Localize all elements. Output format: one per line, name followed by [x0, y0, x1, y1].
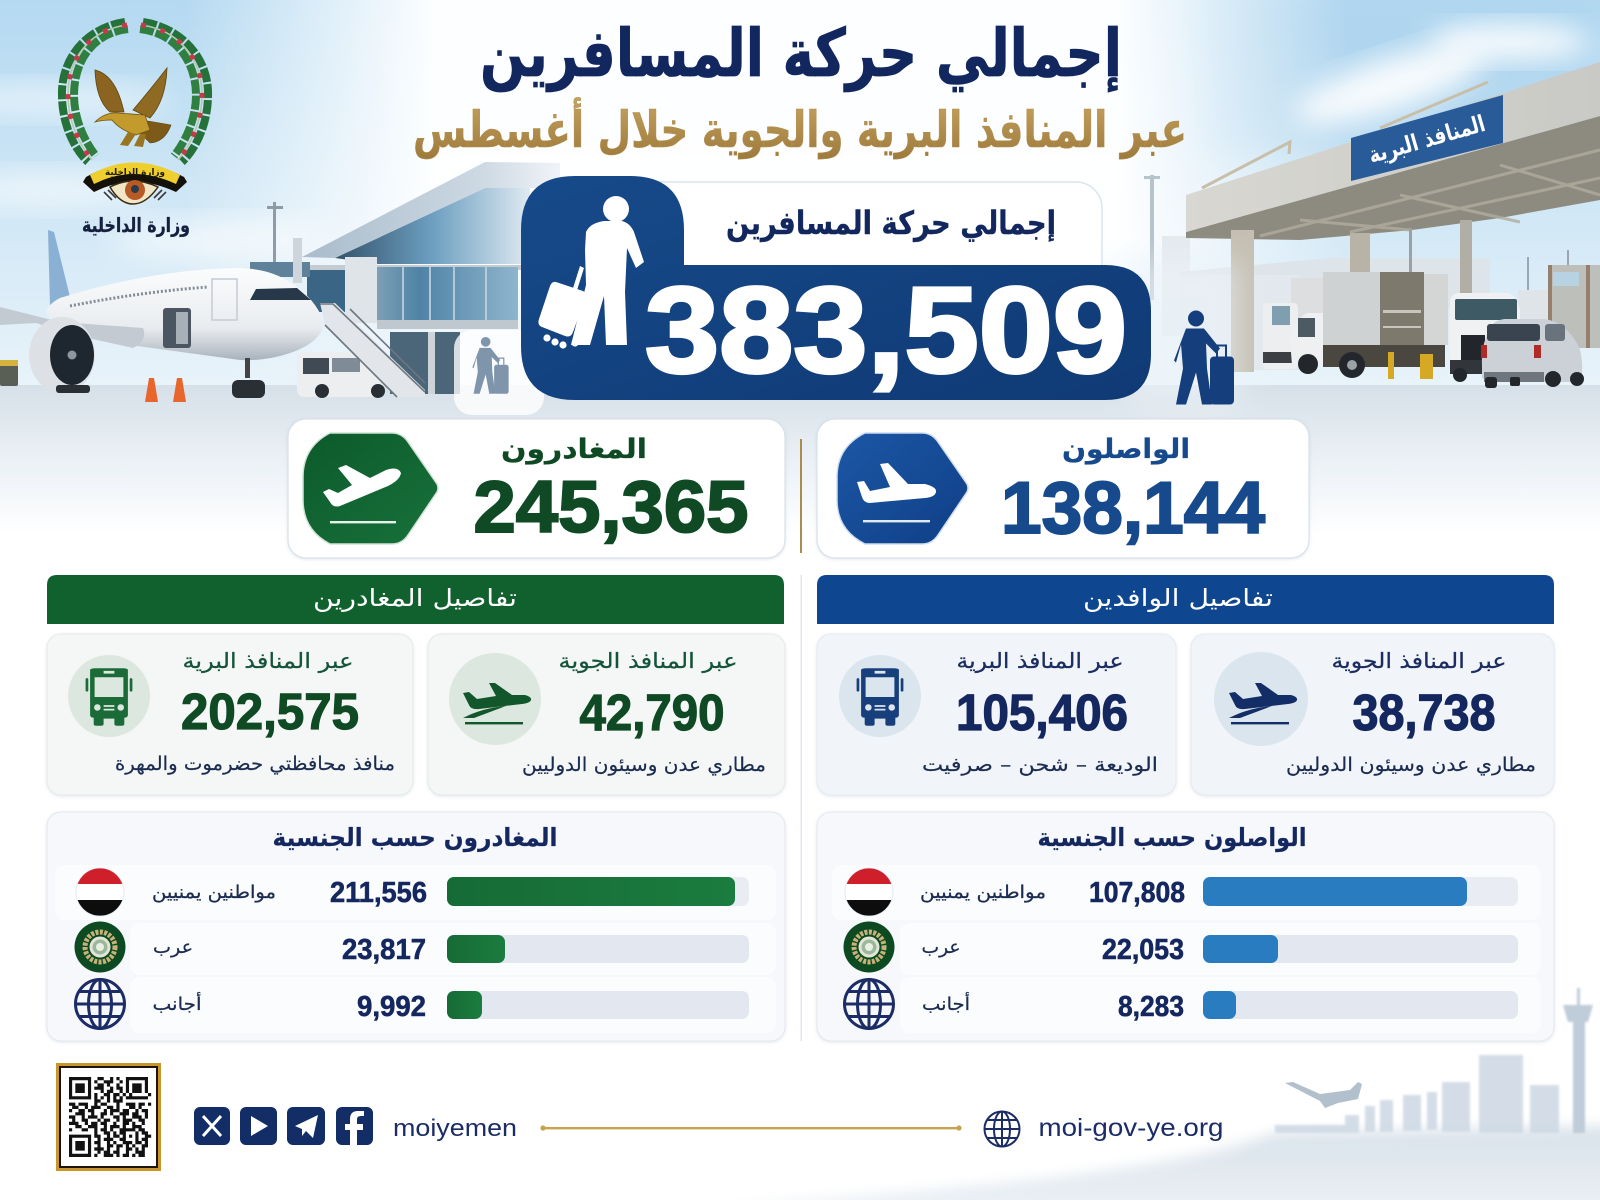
main title: إجمالي حركة المسافرين	[480, 15, 1122, 93]
total navy block	[521, 176, 1151, 400]
row: Foreigners: أجانب	[922, 992, 970, 1015]
logo: ministry emblem: وزارة الداخلية	[105, 168, 165, 178]
icon: departures octagon	[303, 433, 438, 544]
panel: departures summary	[288, 419, 785, 558]
central white fade behind title	[212, 0, 1323, 340]
card: departures by air: 42,790	[580, 684, 724, 741]
row: Arabs: 23,817	[342, 934, 426, 966]
icon: navy passenger	[1174, 310, 1234, 404]
card: departures by air: عبر المنافذ الجوية	[558, 649, 738, 673]
scene: airplane	[0, 230, 324, 402]
row: Foreigners: 8,283	[1118, 991, 1184, 1023]
departures number: 245,365	[474, 467, 748, 548]
icon: traveller with suitcase	[538, 196, 644, 349]
card: departures by land: عبر المنافذ البرية	[182, 649, 354, 673]
handle text: moiyemen	[393, 1115, 517, 1142]
QR code	[58, 1064, 160, 1170]
icon: X	[194, 1107, 230, 1145]
subtitle: عبر المنافذ البرية والجوية خلال أغسطس	[413, 97, 1187, 160]
scene: boarding stairs and van	[297, 303, 425, 398]
connector line	[540, 1125, 962, 1131]
card: arrivals by air: مطاري عدن وسيئون الدوليين	[1286, 754, 1536, 776]
road sign	[1351, 95, 1503, 181]
panel: departures by nationality	[47, 812, 785, 1041]
heading: departures details: تفاصيل المغادرين	[313, 584, 517, 612]
card: departures by land: منافذ محافظتي حضرموت والمهرة	[115, 753, 395, 775]
row: Arabs	[74, 922, 749, 972]
card: departures by air	[428, 634, 785, 795]
row: Yemeni citizens: مواطنين يمنيين	[920, 882, 1046, 903]
card: arrivals by land: الوديعة – شحن – صرفيت	[922, 754, 1158, 776]
row: Yemeni citizens: مواطنين يمنيين	[152, 882, 276, 903]
scene: land port canopy	[1186, 62, 1600, 372]
row: Yemeni citizens	[75, 867, 749, 917]
panel: arrivals summary	[817, 419, 1309, 558]
road sign: المنافذ البرية	[1366, 111, 1488, 169]
row: Arabs: 22,053	[1102, 934, 1184, 966]
heading: arrivals details: تفاصيل الوافدين	[1083, 584, 1273, 612]
logo caption: وزارة الداخلية	[82, 213, 190, 237]
row: Arabs: عرب	[922, 937, 960, 958]
card: departures by land: 202,575	[181, 683, 359, 740]
center divider	[800, 575, 802, 1041]
card: arrivals by air	[1191, 634, 1554, 795]
divider	[800, 439, 802, 553]
scene: airport terminal	[250, 162, 560, 394]
card: arrivals by land: عبر المنافذ البرية	[956, 649, 1124, 673]
icon: arrivals octagon	[837, 433, 968, 544]
card: arrivals by land: 105,406	[956, 684, 1128, 741]
departures label: المغادرون	[501, 434, 647, 465]
row: Yemeni citizens	[844, 867, 1518, 917]
row: Yemeni citizens: 107,808	[1089, 877, 1185, 909]
row: Arabs: عرب	[153, 937, 193, 958]
website text: moi-gov-ye.org	[1038, 1114, 1224, 1142]
row: Foreigners: 9,992	[357, 991, 426, 1023]
heading: departures details	[47, 575, 784, 624]
scene: trucks and car	[1263, 265, 1600, 388]
total card background	[620, 182, 1102, 292]
arrivals label: الواصلون	[1062, 434, 1190, 465]
row: Foreigners: أجانب	[152, 992, 202, 1015]
row: Arabs	[844, 922, 1518, 972]
icon: Facebook	[336, 1107, 373, 1145]
small passenger card, left	[454, 330, 544, 415]
total label: إجمالي حركة المسافرين	[726, 204, 1056, 243]
row: Foreigners	[844, 980, 1518, 1028]
heading: arrivals details	[817, 575, 1554, 624]
card: arrivals by air: عبر المنافذ الجوية	[1332, 649, 1506, 673]
card: arrivals by air: 38,738	[1352, 684, 1496, 741]
card: departures by land	[47, 634, 413, 795]
icon: Telegram	[287, 1107, 325, 1145]
scene: land port buildings	[1144, 175, 1569, 370]
icon: YouTube	[240, 1107, 277, 1145]
haze beside total block	[1130, 260, 1240, 410]
panel: arrivals by nationality	[817, 812, 1554, 1041]
logo: ministry emblem	[62, 22, 208, 204]
icon: website globe	[984, 1112, 1020, 1146]
skyline backdrop	[714, 988, 1600, 1200]
row: Foreigners	[76, 980, 749, 1028]
row: Yemeni citizens: 211,556	[330, 877, 427, 909]
nationality heading: المغادرون حسب الجنسية	[272, 823, 558, 853]
arrivals number: 138,144	[1001, 468, 1265, 549]
card: arrivals by land	[817, 634, 1176, 795]
panel: total passengers	[521, 176, 1151, 400]
total number: 383,509	[645, 262, 1127, 398]
nationality heading: الواصلون حسب الجنسية	[1038, 823, 1306, 853]
card: departures by air: مطاري عدن وسيئون الدوليين	[522, 754, 766, 776]
